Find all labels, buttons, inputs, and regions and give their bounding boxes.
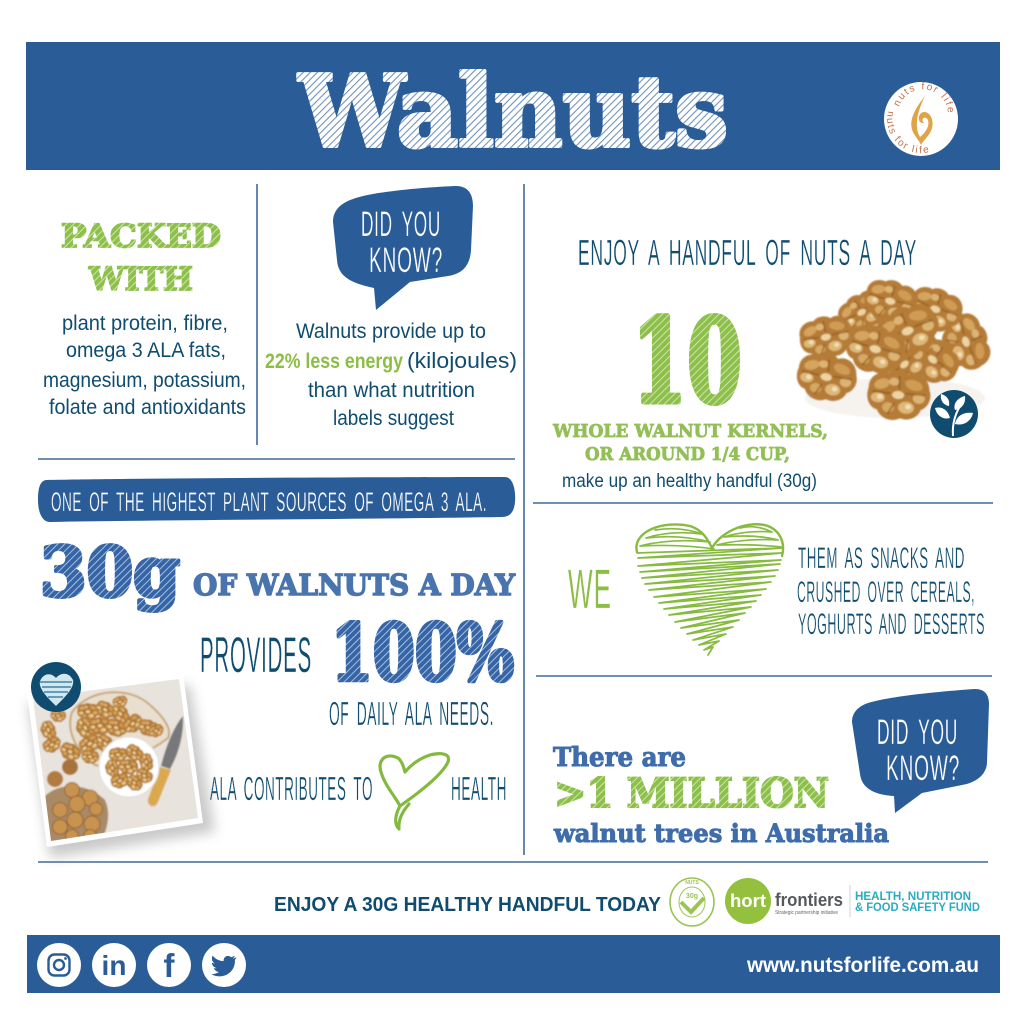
- logo: healthy handful badge: NUTS: [685, 880, 699, 886]
- nutrient list: omega 3 ALA fats,: [66, 339, 226, 362]
- text: health nutrition fund: & FOOD SAFETY FUND: [855, 900, 980, 914]
- tree fact: walnut trees in Australia: [553, 819, 889, 848]
- text: health nutrition fund: HEALTH, NUTRITION: [855, 889, 971, 903]
- icon: instagram: [37, 943, 81, 987]
- panel: omega 3 stats: PROVIDES: [200, 627, 312, 683]
- heart health line: ALA CONTRIBUTES TO: [210, 770, 373, 807]
- logo: hort frontiers: [725, 878, 850, 924]
- kernels caption: OR AROUND 1/4 CUP,: [585, 444, 790, 465]
- text: health nutrition fund: [855, 889, 980, 914]
- energy fact: (kilojoules): [407, 348, 517, 373]
- logo: hort frontiers: hort: [730, 891, 766, 911]
- energy fact: 22% less energy: [265, 350, 403, 373]
- energy fact: [265, 320, 517, 430]
- footer band: [27, 935, 1000, 993]
- photo: walnut kernels: [793, 274, 997, 423]
- text: OF DAILY ALA NEEDS.: [329, 695, 494, 732]
- panel: omega 3 stats: [40, 533, 515, 829]
- logo: nuts for life: nuts for life: [894, 82, 953, 112]
- panel: trees in Australia: [553, 689, 989, 848]
- kernels caption: WHOLE WALNUT KERNELS,: [552, 421, 828, 442]
- sponsor row: [274, 878, 980, 926]
- text: enjoy today: ENJOY A 30G HEALTHY HANDFUL TODAY: [274, 894, 662, 916]
- stat: 100%: 100%: [331, 608, 514, 699]
- heading: packed with: WITH: [88, 260, 193, 298]
- logo: hort frontiers: Strategic partnership initiative: [775, 910, 838, 916]
- divider lines: [38, 184, 993, 862]
- tree fact: >1 MILLION: [554, 770, 829, 817]
- panel: we love them: WE: [568, 557, 612, 620]
- tree fact: [553, 743, 889, 848]
- stat: 30g: 30g: [40, 533, 180, 613]
- header band: [26, 42, 1000, 170]
- panel: we love them: [568, 524, 985, 655]
- kernels caption: make up an healthy handful (30g): [562, 471, 817, 492]
- icon: twitter: [202, 943, 246, 987]
- logo: nuts for life: nuts for life: [887, 112, 928, 154]
- photo: walnuts on table: [20, 662, 215, 858]
- banner: omega 3: [38, 477, 515, 522]
- speech bubble: [333, 186, 473, 310]
- heart health line: [210, 754, 507, 829]
- number 10: 10: [632, 294, 742, 430]
- nutrient list: [43, 312, 246, 419]
- panel: handful: [552, 232, 997, 492]
- tree fact: There are: [553, 743, 686, 773]
- icon: facebook: f: [164, 947, 176, 984]
- panel: packed with: [43, 217, 246, 419]
- icon: scribble heart badge: [31, 662, 81, 712]
- icon: linkedin: in: [102, 950, 126, 981]
- icon: plant: [930, 390, 978, 438]
- panel: did you know energy: [265, 186, 517, 430]
- logo: hort frontiers: frontiers: [775, 890, 843, 910]
- text: snacks and cereals: [797, 542, 985, 641]
- heading: packed with: [61, 217, 221, 298]
- energy fact: labels suggest: [333, 407, 454, 430]
- energy fact: Walnuts provide up to: [296, 320, 486, 343]
- heading: packed with: PACKED: [61, 217, 221, 255]
- website: www.nutsforlife.com.au: [746, 954, 979, 977]
- speech bubble: [852, 689, 989, 813]
- speech bubble: KNOW?: [886, 749, 960, 788]
- kernels caption: [552, 421, 828, 492]
- logo: nuts for life: [884, 82, 958, 156]
- logo: healthy handful badge: 30g: [686, 893, 698, 900]
- speech bubble: KNOW?: [369, 241, 443, 280]
- text: of walnuts a day: OF WALNUTS A DAY: [193, 568, 515, 602]
- banner: omega 3: ONE OF THE HIGHEST PLANT SOURCES OF OMEGA 3 ALA.: [51, 487, 487, 517]
- text: HEALTH: [451, 770, 507, 807]
- speech bubble: DID YOU: [361, 205, 441, 244]
- icon: facebook: [147, 943, 191, 987]
- nutrient list: magnesium, potassium,: [43, 369, 246, 392]
- logo: healthy handful badge: [670, 878, 714, 926]
- nutrient list: folate and antioxidants: [49, 396, 246, 419]
- energy fact: than what nutrition: [308, 379, 475, 402]
- icon: scribble heart: [636, 524, 783, 655]
- title: Walnuts: [298, 55, 728, 170]
- nutrient list: plant protein, fibre,: [62, 312, 228, 335]
- icon: linkedin: [92, 943, 136, 987]
